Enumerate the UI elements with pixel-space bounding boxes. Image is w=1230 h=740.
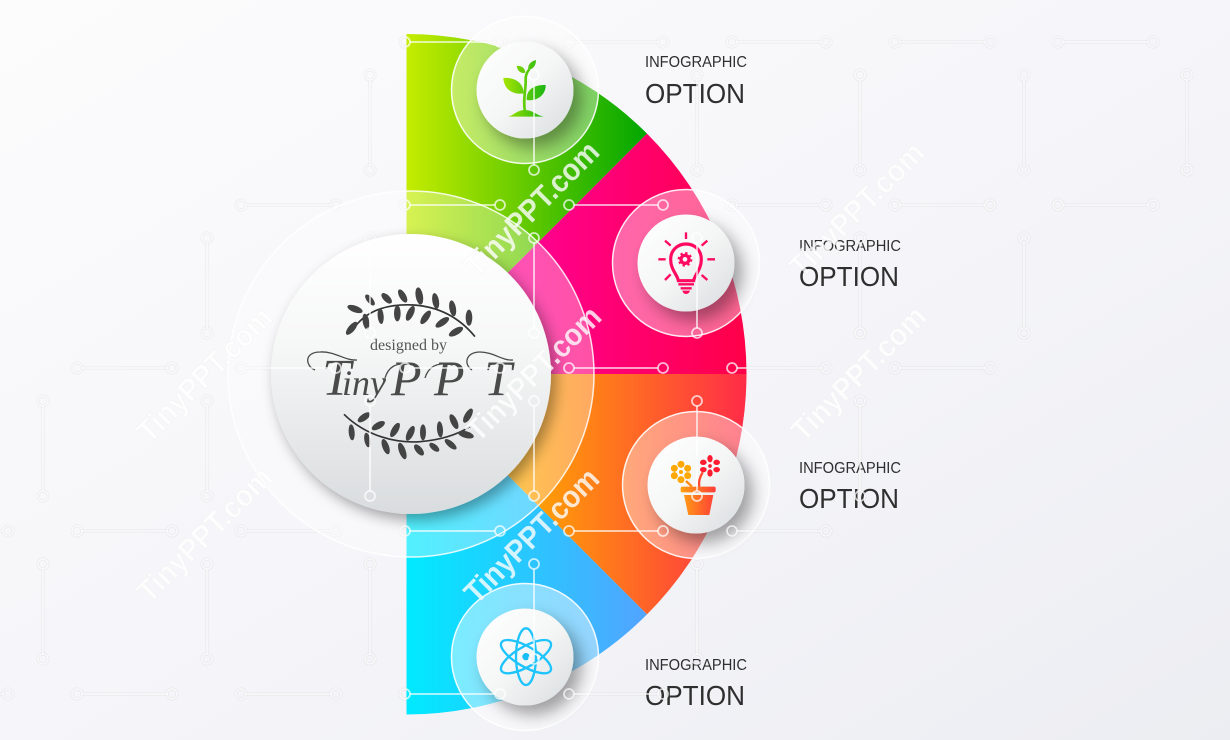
central glass ring bbox=[228, 191, 594, 557]
option 3 node bbox=[622, 412, 770, 558]
icon: potted flowers bbox=[671, 455, 720, 515]
logo: TinyPPT script: T bbox=[322, 350, 354, 407]
option 3 glass ring bbox=[622, 412, 770, 558]
option 1 disc bbox=[476, 42, 574, 138]
watermarks: TinyPPT.com bbox=[459, 299, 608, 448]
logo: lower laurel bbox=[344, 407, 475, 460]
option 1 glass ring bbox=[452, 16, 598, 164]
option 2 node bbox=[612, 190, 760, 336]
option 4 node bbox=[452, 584, 598, 730]
watermarks: TinyPPT.com bbox=[784, 299, 933, 448]
option 3 disc bbox=[648, 436, 744, 534]
central disc bbox=[271, 234, 551, 514]
segment: pink bbox=[406, 134, 746, 374]
logo: TinyPPT script: iny bbox=[342, 363, 386, 403]
watermarks: TinyPPT.com bbox=[782, 135, 931, 284]
icon: sprouting plant bbox=[503, 60, 546, 117]
option 4 disc bbox=[476, 608, 574, 706]
label: option 1: OPTION bbox=[645, 78, 745, 109]
watermarks: TinyPPT.com bbox=[457, 134, 606, 283]
segment: green bbox=[406, 34, 647, 374]
segment: blue bbox=[406, 374, 647, 714]
label: option 2: OPTION bbox=[799, 261, 899, 292]
logo: upper laurel bbox=[344, 287, 475, 339]
logo: designed by: designed by bbox=[370, 337, 447, 354]
watermarks: TinyPPT.com bbox=[130, 460, 279, 609]
icon: light bulb with gear bbox=[658, 232, 715, 294]
option 4 glass ring bbox=[452, 584, 598, 730]
label: option 1 bbox=[645, 54, 747, 109]
label: option 2 bbox=[799, 238, 901, 292]
label: option 4 bbox=[645, 657, 747, 711]
logo: script swashes bbox=[308, 352, 513, 378]
label: option 1: INFOGRAPHIC bbox=[645, 54, 747, 71]
watermarks: TinyPPT.com bbox=[457, 461, 606, 610]
watermarks: TinyPPT.com bbox=[130, 300, 279, 449]
label: option 4: OPTION bbox=[645, 680, 745, 711]
option 2 glass ring bbox=[612, 190, 760, 336]
label: option 3: INFOGRAPHIC bbox=[799, 460, 901, 477]
wedge chart bbox=[406, 34, 746, 714]
logo: designed by TinyPPT bbox=[308, 287, 515, 460]
segment: orange bbox=[406, 374, 746, 614]
option 1 node bbox=[452, 16, 598, 164]
logo: TinyPPT script: PPT bbox=[390, 350, 515, 406]
label: option 3 bbox=[799, 460, 901, 514]
label: option 3: OPTION bbox=[799, 483, 899, 514]
label: option 2: INFOGRAPHIC bbox=[799, 238, 901, 255]
option 2 disc bbox=[638, 214, 734, 312]
label: option 4: INFOGRAPHIC bbox=[645, 657, 747, 674]
icon: atom bbox=[496, 628, 556, 685]
watermarks bbox=[130, 134, 933, 610]
